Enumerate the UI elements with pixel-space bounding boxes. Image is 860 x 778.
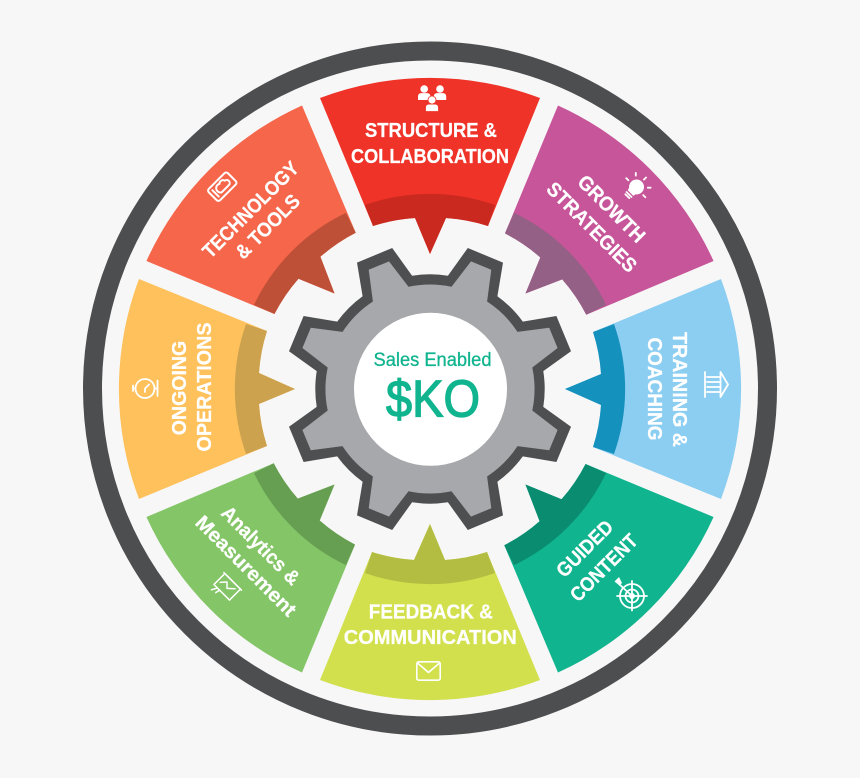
heading: ongoing operations: OPERATIONS xyxy=(194,322,216,452)
inner band and pointer: feedback & communication xyxy=(365,524,495,584)
panel: analytics & measurement xyxy=(132,407,412,687)
heading: guided content: CONTENT xyxy=(566,530,643,606)
inner band and pointer: structure & collaboration xyxy=(365,194,495,254)
heading: ongoing operations: ONGOING xyxy=(169,341,191,435)
panel: growth strategies xyxy=(448,91,728,371)
icon: tablet with cloud xyxy=(207,171,238,202)
heading: growth strategies: STRATEGIES xyxy=(542,178,641,277)
central gear xyxy=(289,248,571,530)
heading: analytics & measurement: Analytics & xyxy=(216,502,304,590)
heading: structure & collaboration: STRUCTURE & xyxy=(365,120,497,142)
heading: feedback & communication: COMMUNICATION xyxy=(344,627,517,649)
panel: feedback & communication xyxy=(320,524,540,700)
center label: Sales Enabled: Sales Enabled xyxy=(374,350,492,371)
icon: target with arrow xyxy=(614,577,647,610)
inner band and pointer: analytics & measurement xyxy=(246,438,381,573)
heading: growth strategies: GROWTH xyxy=(573,171,649,248)
inner band and pointer: guided content xyxy=(479,438,614,573)
heading: training & coaching: COACHING xyxy=(643,338,665,440)
center white hub xyxy=(354,313,507,466)
icon: envelope xyxy=(417,662,440,680)
panel: technology & tools xyxy=(132,91,412,371)
panel: training & coaching xyxy=(565,279,741,499)
icon: team people xyxy=(418,85,446,112)
inner band and pointer: growth strategies xyxy=(479,205,614,340)
inner band and pointer: technology & tools xyxy=(246,205,381,340)
heading: technology & tools: & TOOLS xyxy=(231,190,305,264)
outer dark ring xyxy=(92,51,768,726)
panel: structure & collaboration xyxy=(320,78,540,254)
heading: training & coaching: TRAINING & xyxy=(668,332,690,447)
center label: $KO: $KO xyxy=(386,371,480,429)
icon: light bulb xyxy=(618,168,656,206)
heading: guided content: GUIDED xyxy=(552,516,618,582)
heading: analytics & measurement: Measurement xyxy=(191,512,300,622)
inner band and pointer: ongoing operations xyxy=(235,324,295,454)
heading: technology & tools: TECHNOLOGY xyxy=(198,157,304,263)
icon: institution building xyxy=(705,372,728,397)
icon: chart on easel xyxy=(209,573,241,605)
panel: guided content xyxy=(448,407,728,687)
panel: ongoing operations xyxy=(119,279,295,499)
icon: stopwatch xyxy=(133,379,158,398)
inner band and pointer: training & coaching xyxy=(565,324,625,454)
heading: feedback & communication: FEEDBACK & xyxy=(369,601,493,623)
heading: structure & collaboration: COLLABORATION xyxy=(351,146,509,168)
